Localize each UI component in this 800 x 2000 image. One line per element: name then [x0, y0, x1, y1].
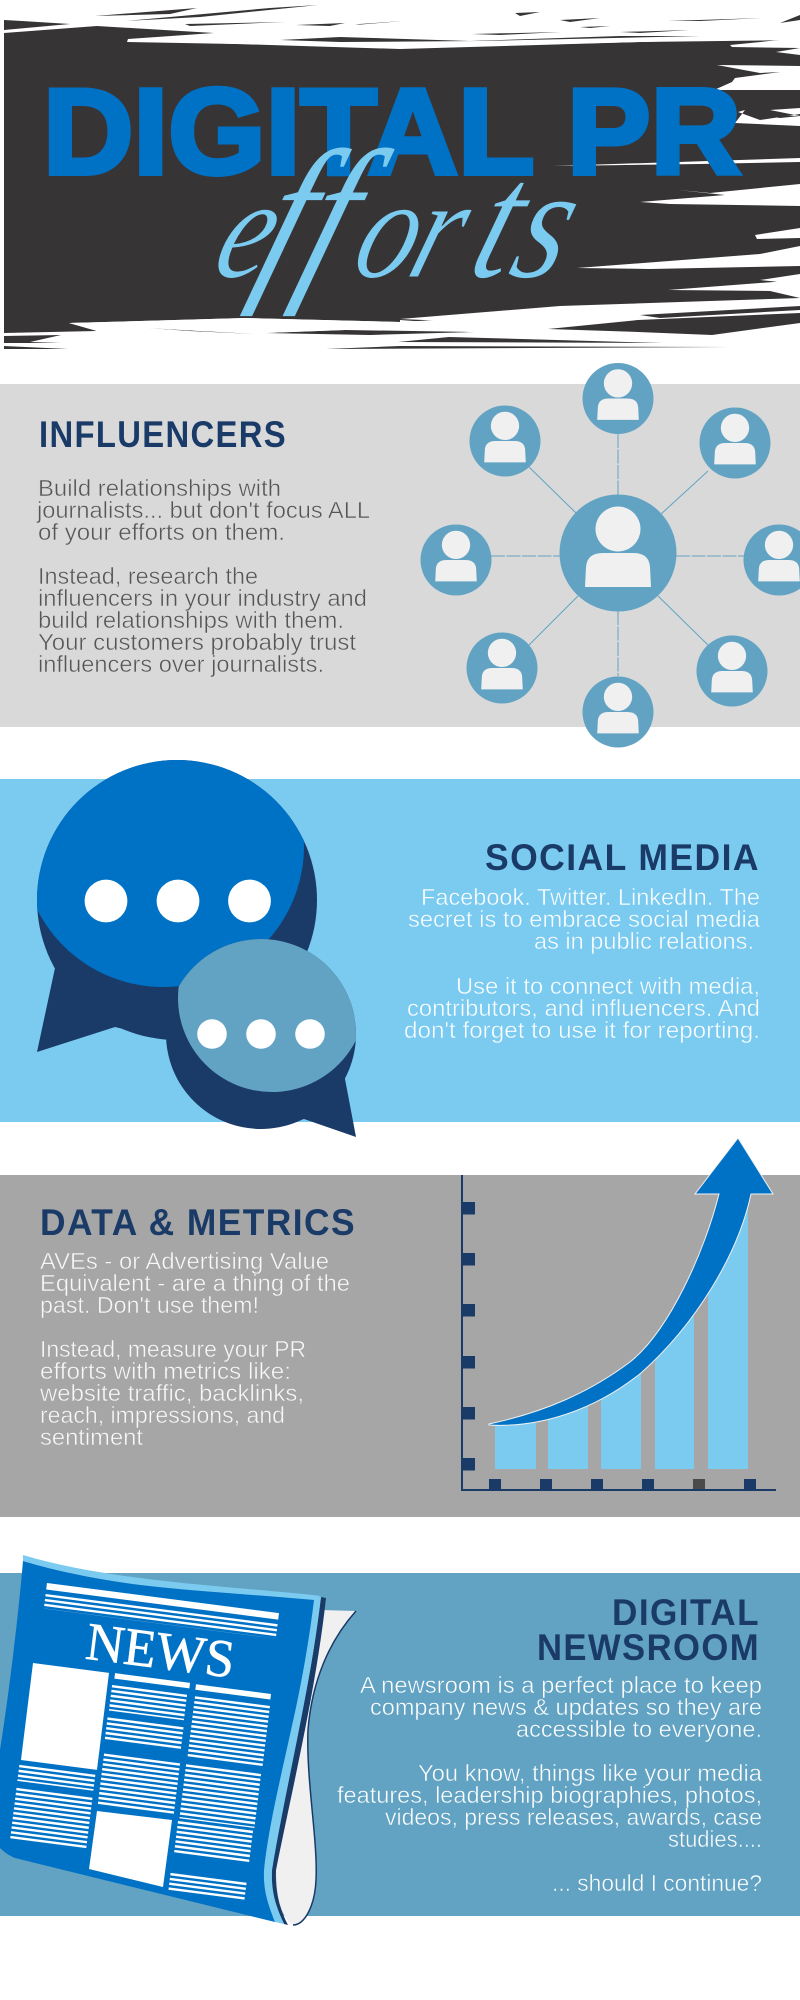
node: left — [420, 524, 492, 596]
text block: newsroom body: ... should I continue? — [552, 1870, 762, 1896]
icon: small speech bubble — [166, 939, 356, 1137]
text block: influencers body: Instead, research the — [38, 563, 258, 589]
text block: social media body — [404, 884, 760, 1043]
node: top — [582, 363, 654, 434]
text block: influencers body: build relationships with them. — [38, 607, 344, 633]
arrow: rising trend — [489, 1138, 773, 1425]
text block: data body: past. Don't use them! — [40, 1292, 259, 1318]
navy page strip — [272, 1597, 326, 1925]
node: upper right — [700, 408, 770, 478]
subtitle: efforts: f — [238, 113, 364, 317]
node: lower left — [466, 632, 538, 704]
heading: data and metrics: DATA & METRICS — [40, 1202, 356, 1243]
heading: influencers: INFLUENCERS — [39, 414, 287, 455]
text block: data body: AVEs - or Advertising Value — [40, 1248, 329, 1274]
panel: social media — [0, 760, 800, 1137]
text block: influencers body: Your customers probably trust — [38, 629, 357, 655]
subtitle: efforts: f — [280, 113, 407, 317]
text block: newsroom body: accessible to everyone. — [516, 1716, 762, 1742]
heading: digital newsroom: DIGITAL — [612, 1592, 760, 1633]
subtitle: efforts: t — [453, 129, 555, 314]
text block: influencers body: influencers in your industry and — [38, 585, 367, 611]
network diagram — [420, 363, 800, 748]
subtitle: efforts: o — [337, 150, 448, 309]
hub person — [560, 494, 676, 612]
text block: social media body: secret is to embrace social media — [408, 906, 760, 932]
photo block — [89, 1811, 172, 1887]
text block: influencers body — [36, 475, 370, 677]
text block: data body: sentiment — [40, 1424, 144, 1450]
text block: social media body: don't forget to use it for reporting. — [404, 1017, 760, 1043]
text block: data body: reach, impressions, and — [40, 1402, 285, 1428]
heading: digital newsroom — [537, 1592, 760, 1668]
panel: digital newsroom — [0, 1555, 800, 1925]
text block: newsroom body: studies.... — [668, 1826, 762, 1852]
text block: influencers body: Build relationships with — [38, 475, 281, 501]
text block: newsroom body — [337, 1672, 762, 1896]
subtitle: efforts: s — [494, 133, 604, 312]
text block: newsroom body: You know, things like your media — [418, 1760, 762, 1786]
text block: social media body: contributors, and influencers. And — [407, 995, 760, 1021]
text block: data body: Equivalent - are a thing of the — [40, 1270, 350, 1296]
masthead: NEWS: NEWS — [83, 1611, 238, 1690]
subtitle: efforts — [196, 113, 610, 317]
node: upper left — [470, 406, 540, 476]
panel: data and metrics — [0, 1138, 800, 1517]
text block: newsroom body: A newsroom is a perfect place to keep — [360, 1672, 762, 1698]
top page strip — [23, 1555, 321, 1600]
icon: large speech bubble — [37, 760, 317, 1052]
header: brush stroke banner — [4, 5, 800, 349]
icon: newspaper — [0, 1555, 356, 1925]
back page — [276, 1610, 356, 1925]
text block: data body: Instead, measure your PR — [40, 1336, 306, 1362]
light blue page strip — [264, 1597, 321, 1924]
panel: influencers — [0, 363, 800, 748]
back page edge — [293, 1611, 356, 1925]
newspaper print — [7, 1582, 281, 1901]
front page — [0, 1561, 314, 1922]
text block: social media body: Use it to connect with media, — [456, 973, 760, 999]
heading: digital newsroom: NEWSROOM — [537, 1627, 760, 1668]
node: bottom — [582, 676, 654, 748]
node: lower right — [696, 636, 768, 706]
text block: data body: website traffic, backlinks, — [39, 1380, 304, 1406]
node: right — [744, 524, 800, 596]
subtitle: efforts: e — [199, 150, 303, 309]
title: DIGITAL PR: DIGITAL PR — [43, 64, 741, 200]
text block: influencers body: journalists... but don't focus ALL — [36, 497, 370, 523]
text block: influencers body: influencers over journalists. — [38, 651, 324, 677]
text block: newsroom body: company news & updates so they are — [370, 1694, 762, 1720]
text block: social media body: Facebook. Twitter. LinkedIn. The — [421, 884, 760, 910]
text block: newsroom body: features, leadership biographies, photos, — [337, 1782, 762, 1808]
subtitle: efforts: r — [393, 150, 492, 309]
chart: growth bars — [462, 1175, 776, 1490]
text block: newsroom body: videos, press releases, awards, case — [385, 1804, 762, 1830]
text block: social media body: as in public relations. — [534, 928, 754, 954]
text block: influencers body: of your efforts on them. — [38, 519, 285, 545]
text block: data body — [39, 1248, 350, 1450]
heading: social media: SOCIAL MEDIA — [485, 837, 760, 878]
text block: data body: efforts with metrics like: — [40, 1358, 291, 1384]
